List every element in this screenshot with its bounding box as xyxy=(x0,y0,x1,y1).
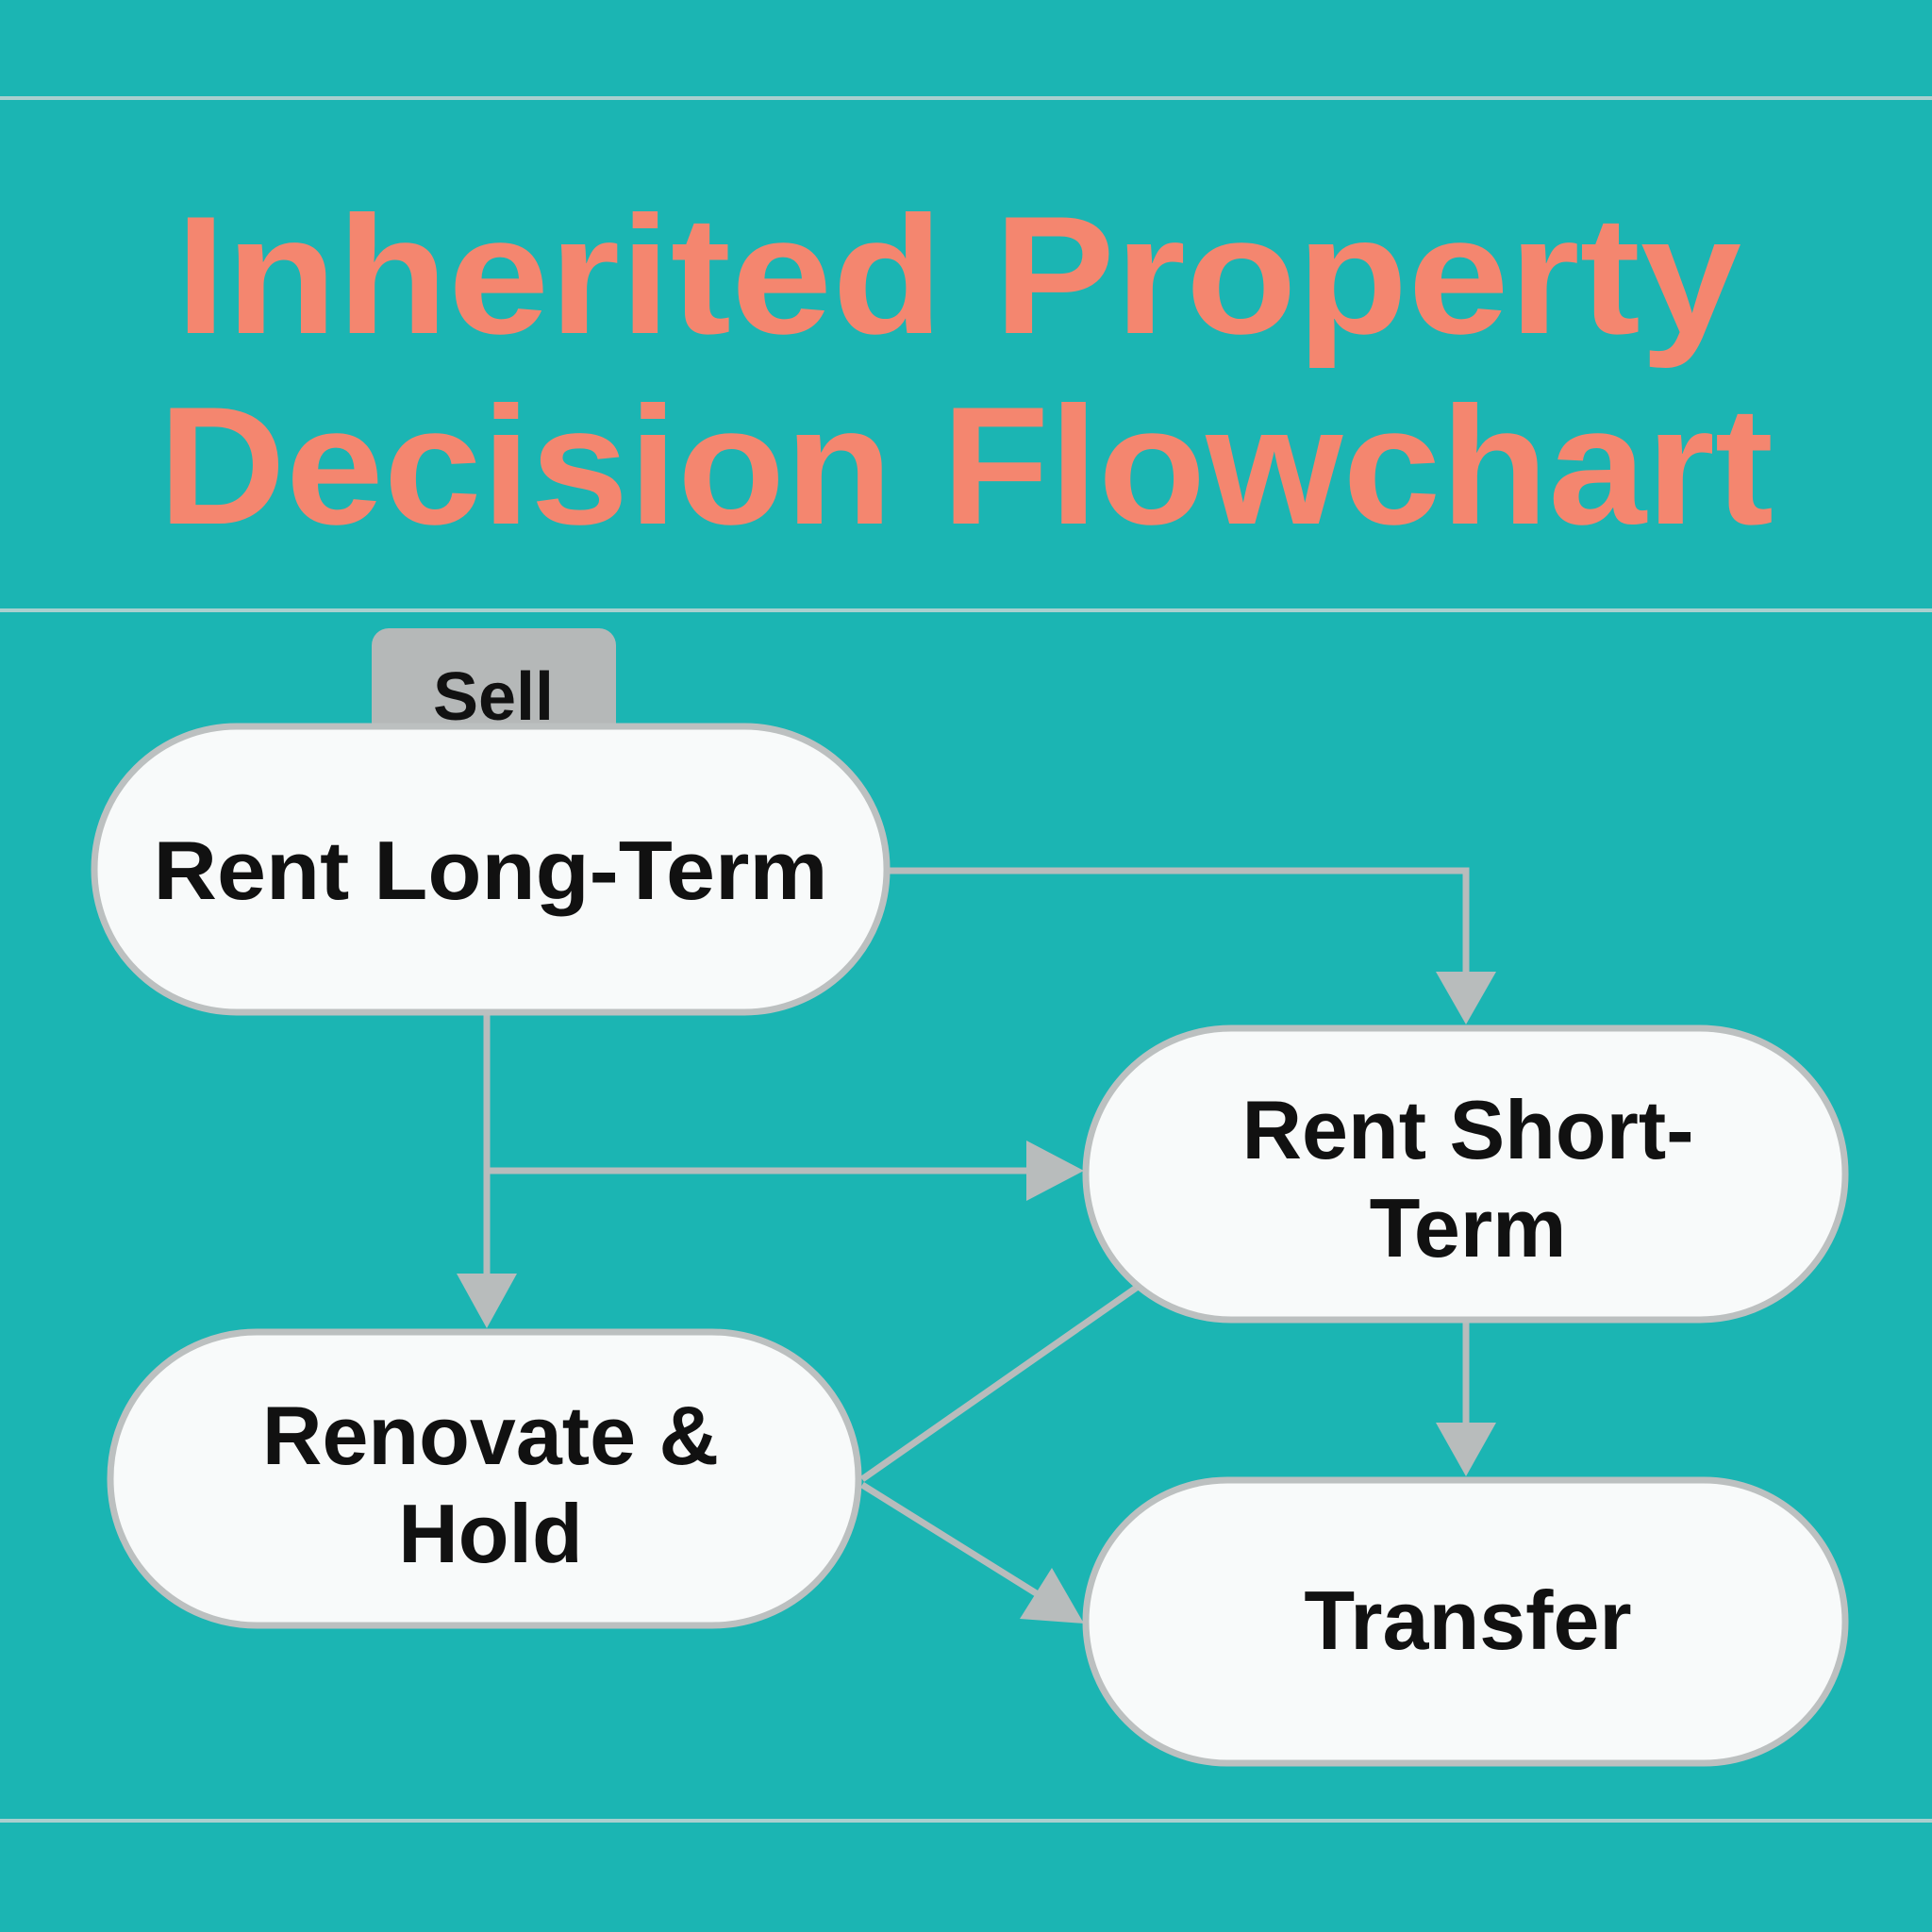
title: Decision Flowchart xyxy=(158,372,1774,559)
title: Inherited Property xyxy=(175,181,1741,369)
node: Rent Long-Term: Rent Long-Term xyxy=(153,824,828,917)
node: Rent Short-Term xyxy=(1086,1028,1845,1320)
node: Renovate & Hold: Hold xyxy=(398,1487,583,1580)
node: Renovate & Hold: Renovate & xyxy=(262,1389,719,1482)
arrow: renovate to transfer xyxy=(862,1485,1084,1624)
arrow: branch to short-term xyxy=(487,1141,1084,1201)
tab: Sell: Sell xyxy=(433,659,554,735)
node: Rent Short-Term: Rent Short- xyxy=(1241,1083,1694,1176)
arrow: long-term down to renovate xyxy=(457,1013,517,1328)
arrow: short-term to transfer xyxy=(1436,1321,1496,1476)
node: Rent Short-Term: Term xyxy=(1370,1181,1566,1274)
title xyxy=(158,181,1774,559)
arrow: long-term to short-term xyxy=(887,871,1496,1024)
node: Transfer xyxy=(1086,1480,1845,1763)
node: Rent Long-Term xyxy=(94,726,887,1012)
tab: Sell xyxy=(372,628,616,746)
node: Renovate & Hold xyxy=(110,1332,858,1625)
node: Transfer: Transfer xyxy=(1304,1574,1632,1667)
connector: renovate to short-term xyxy=(862,1287,1138,1479)
